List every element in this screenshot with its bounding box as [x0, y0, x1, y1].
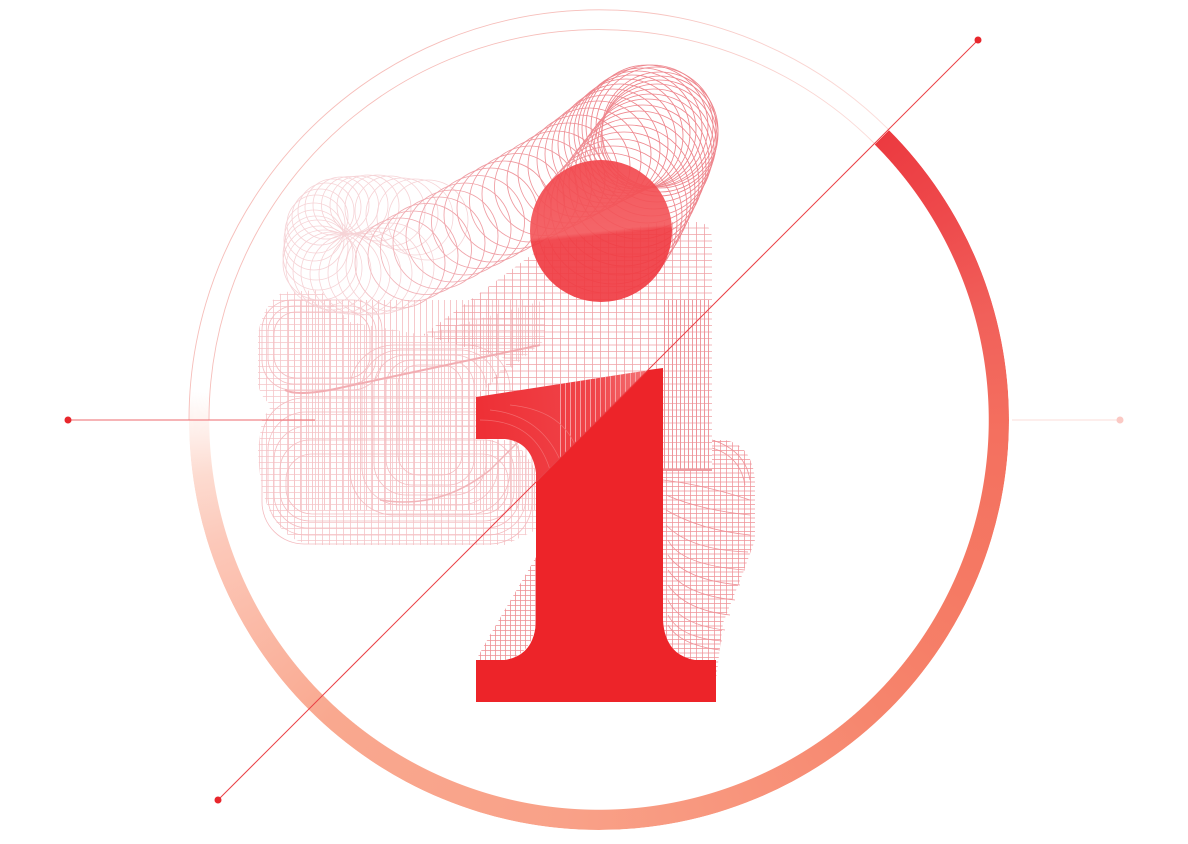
- letter i: translucent serif above diagonal: [476, 370, 650, 482]
- thick gradient ring arc: [189, 130, 1009, 830]
- pale return loop of the circle spring, left end: [283, 175, 468, 315]
- letter i: dot: [530, 160, 672, 302]
- spring of circles: tube from left loop up to dot: [355, 65, 718, 308]
- letter i: solid stem and base: [476, 368, 716, 702]
- right horizontal pale line with dot: [1012, 416, 1124, 424]
- wireframe grid: upper right slab: [423, 222, 712, 470]
- thin outer ring arcs: [189, 10, 889, 420]
- wireframe grid: lower right blob: [663, 440, 755, 680]
- diagonal line with end dots: [214, 36, 982, 804]
- wireframe grid: pale left blob: [258, 290, 545, 545]
- left horizontal line with dot: [64, 416, 315, 424]
- wireframe grid: lower left stepped triangle: [476, 557, 536, 660]
